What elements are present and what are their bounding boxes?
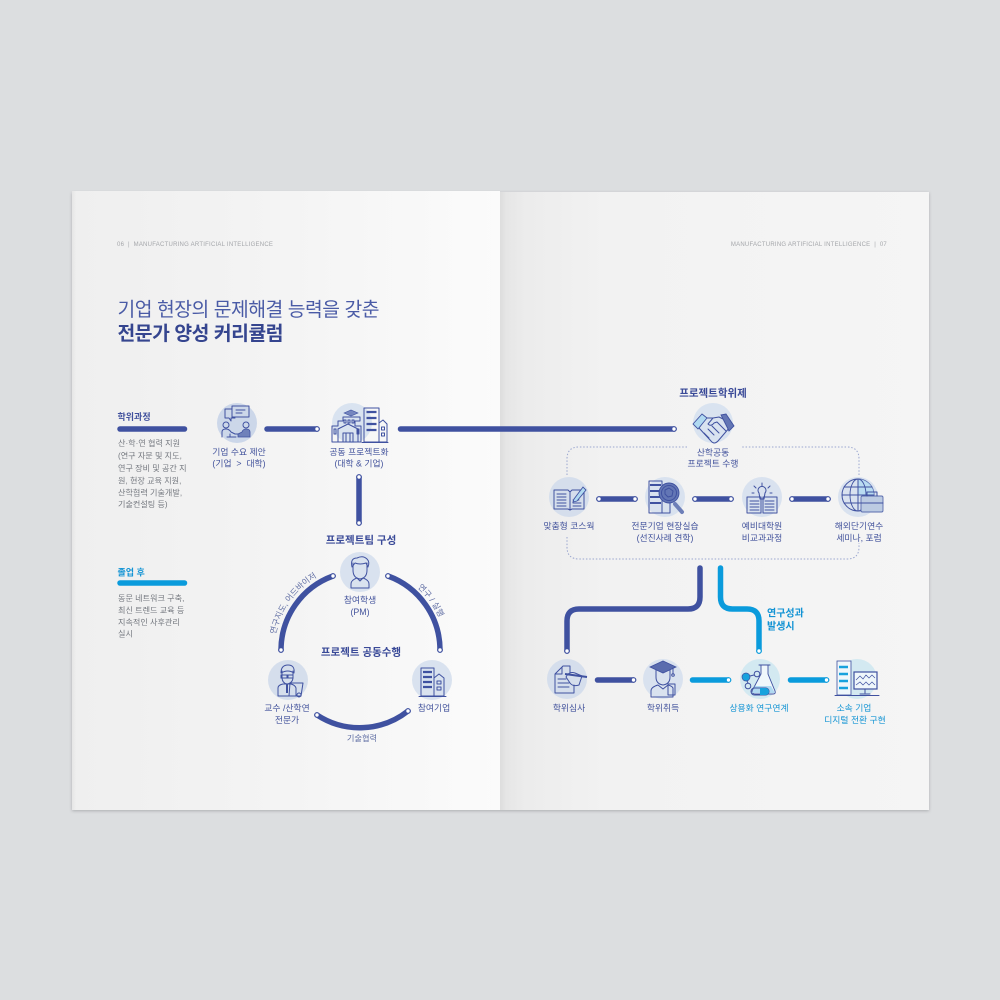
connector: course to practice (597, 497, 637, 501)
connector: proposal to project (267, 427, 319, 431)
panel: right page (500, 192, 929, 810)
title: 기업 현장의 문제해결 능력을 갖춘 (118, 299, 380, 321)
arc label: advising: 연구지도, 어드바이저 (270, 572, 316, 633)
label: pre-graduate extracurricular: 비교과과정 (742, 533, 782, 543)
connector: research to digital transformation (790, 678, 829, 682)
label: professor: 전문가 (275, 715, 299, 725)
label: joint project: 공동 프로젝트화 (329, 447, 389, 457)
icon: magnifier and building (645, 477, 685, 517)
panel: degree course note: 원, 현장 교육 지원, (118, 476, 181, 486)
panel: degree course note: 학위과정 (118, 411, 151, 422)
arc label: research: 연구 / 실행 (418, 584, 445, 616)
callout: when research results occur: 연구성과 (767, 606, 804, 620)
label: pre-graduate extracurricular (742, 521, 782, 543)
connector: practice to extracurricular (693, 497, 733, 501)
connector: extracurricular to overseas (790, 497, 830, 501)
label: company field practice: (선진사례 견학) (637, 532, 693, 543)
label: company field practice: 전문기업 현장실습 (631, 521, 699, 531)
label: participating company: 참여기업 (418, 702, 450, 713)
label: company proposal (212, 447, 266, 468)
right running header: MANUFACTURING ARTIFICIAL INTELLIGENCE | 07 (731, 242, 887, 248)
label: student PM: (PM) (350, 607, 370, 617)
dotted frame (567, 447, 859, 559)
label: commercial research link: 상용화 연구연계 (729, 702, 789, 713)
label: overseas training: 해외단기연수 (835, 520, 883, 531)
label: company proposal: (기업 > 대학) (212, 458, 266, 468)
panel: after graduation note (118, 566, 185, 638)
panel: left page (72, 191, 500, 810)
label: overseas training: 세미나, 포럼 (836, 533, 882, 543)
label: pre-graduate extracurricular: 예비대학원 (742, 521, 782, 531)
title: 전문가 양성 커리큘럼 (118, 323, 284, 345)
icon: globe and briefcase (838, 477, 883, 517)
heading: project team: 프로젝트팀 구성 (326, 534, 396, 546)
label: digital transformation (824, 703, 886, 725)
label: student PM: 참여학생 (344, 594, 376, 605)
icon: book and light bulb (742, 477, 782, 517)
label: joint industry-academia project: 산학공동 (697, 448, 729, 458)
label: degree acquisition: 학위취득 (647, 703, 679, 713)
connector: navy path to degree review (565, 568, 700, 653)
label: custom coursework: 맞춤형 코스웍 (543, 520, 595, 531)
heading: joint project execution: 프로젝트 공동수행 (321, 646, 401, 658)
panel: degree course note: 산·학·연 협력 지원 (118, 438, 180, 448)
label: digital transformation: 디지털 전환 구현 (824, 714, 886, 725)
icon: signing document (547, 659, 587, 699)
label: joint industry-academia project (687, 448, 739, 468)
panel: after graduation note: 실시 (118, 628, 133, 638)
callout: when research results occur: 발생시 (767, 620, 795, 632)
connector: long line to project degree (400, 427, 676, 431)
label: joint project (329, 447, 389, 468)
icon: graduate (643, 659, 683, 699)
icon: company proposal meeting (217, 403, 257, 443)
panel: after graduation note: 졸업 후 (118, 566, 145, 578)
title (118, 299, 380, 345)
panel: after graduation note: 지속적인 사후관리 (118, 617, 180, 627)
label: digital transformation: 소속 기업 (837, 703, 871, 713)
icon: company tower (412, 660, 452, 700)
icon: open book (549, 477, 589, 517)
panel: degree course note: 연구 장비 및 공간 지 (118, 463, 187, 473)
icon: student (340, 552, 380, 592)
arc label: technical cooperation: 기술협력 (347, 733, 377, 743)
left running header: 06 | MANUFACTURING ARTIFICIAL INTELLIGENCE (117, 242, 273, 248)
label: student PM (344, 594, 376, 617)
label: professor (264, 703, 310, 725)
panel: after graduation note: 동문 네트워크 구축, (118, 594, 184, 603)
label: joint project: (대학 & 기업) (334, 458, 384, 468)
icon: handshake (693, 403, 734, 443)
callout: when research results occur (767, 606, 804, 632)
icon: professor (268, 660, 308, 700)
panel: degree course note: 산학협력 기술개발, (118, 488, 182, 498)
chart: cycle arcs (279, 574, 442, 728)
panel: degree course note (118, 411, 187, 509)
label: company field practice (631, 521, 699, 543)
connector: vertical to project team (357, 475, 361, 525)
label: joint industry-academia project: 프로젝트 수행 (687, 458, 739, 468)
label: overseas training (835, 520, 883, 543)
label: degree review: 학위심사 (553, 703, 585, 713)
label: professor: 교수 /산학연 (264, 703, 310, 713)
icon: flask and molecule (740, 659, 780, 699)
label: company proposal: 기업 수요 제안 (212, 447, 266, 457)
connector: review to degree (598, 678, 636, 682)
connector: cyan path to commercial research (720, 568, 761, 653)
heading: project degree: 프로젝트학위제 (679, 386, 747, 400)
panel: degree course note: (연구 자문 및 지도, (118, 450, 182, 460)
icon: school and company buildings (332, 403, 388, 443)
book shadow (72, 193, 929, 811)
icon: server and monitor (835, 659, 879, 699)
panel: after graduation note: 최신 트렌드 교육 등 (118, 605, 185, 615)
panel: degree course note: 기술컨설팅 등) (118, 499, 168, 509)
connector: degree to research (692, 678, 731, 682)
